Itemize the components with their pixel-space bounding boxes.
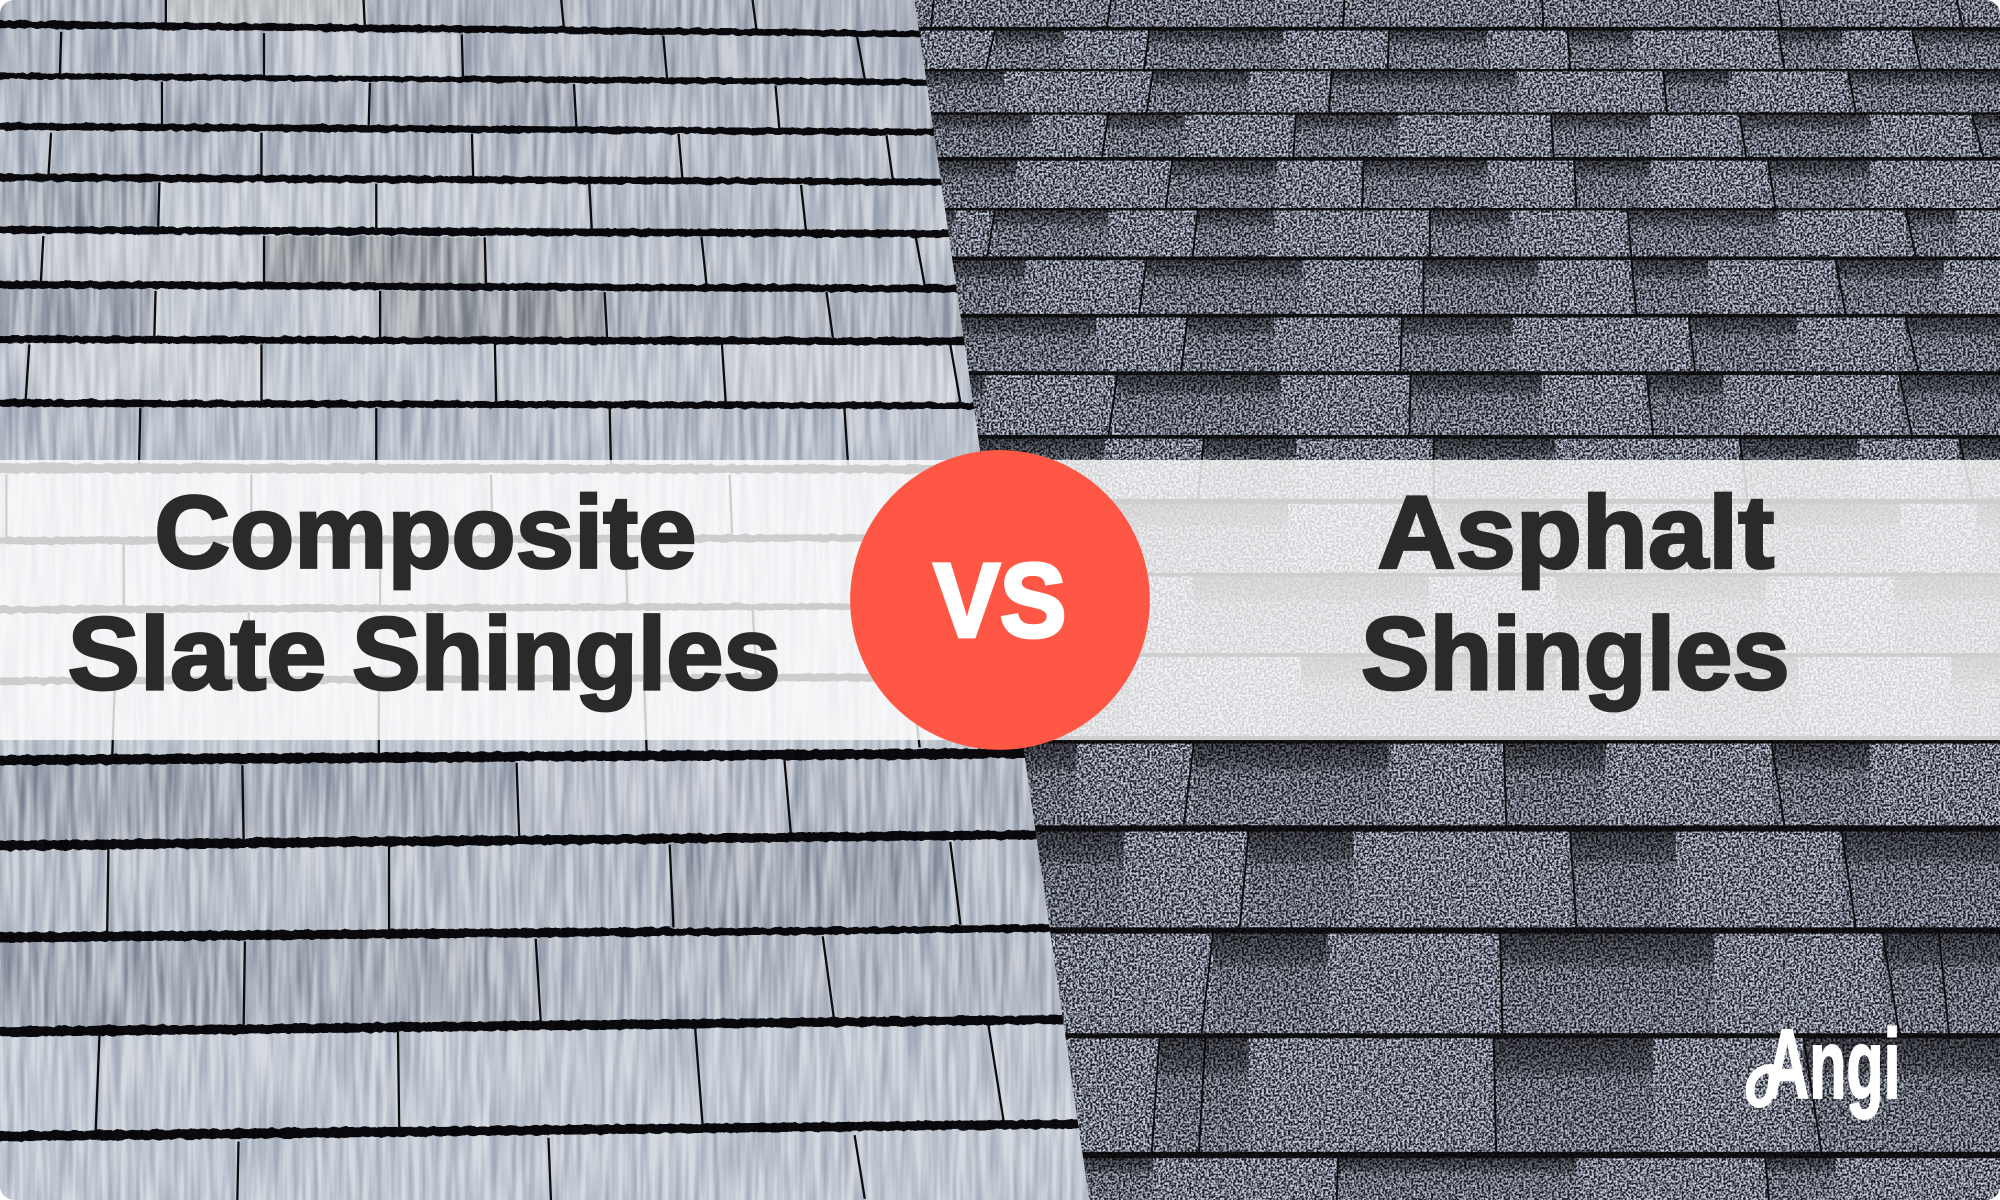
- slate tile tone variations: [0, 0, 950, 1027]
- asphalt shingle rows behind band: [1063, 504, 2000, 736]
- heading: composite slate shingles: Shingles: [352, 595, 781, 711]
- slate streak texture: [0, 0, 1148, 1200]
- asphalt shingle rows below band: [995, 744, 2000, 1200]
- heading: composite slate shingles: Composite: [154, 474, 696, 590]
- panel: composite slate shingles photo: [0, 0, 1148, 1200]
- logo: Angi: Angi: [1765, 1009, 1901, 1119]
- vs badge: VS: [934, 542, 1066, 659]
- vs badge: [850, 450, 1150, 750]
- slate tile joints: [6, 0, 1004, 1200]
- title band: [0, 460, 2000, 740]
- heading: asphalt shingles: Asphalt: [1378, 474, 1774, 590]
- heading: composite slate shingles: [68, 474, 781, 711]
- panel: asphalt shingles photo: [893, 0, 2000, 1200]
- asphalt granule texture: [893, 0, 2000, 1200]
- heading: asphalt shingles: Shingles: [1361, 595, 1790, 711]
- asphalt shingle rows above band: [893, 0, 2000, 499]
- heading: composite slate shingles: Slate: [68, 595, 327, 711]
- heading: asphalt shingles: [1361, 474, 1790, 711]
- logo: Angi: [1746, 1026, 1897, 1120]
- slate tile rows: [0, 0, 1148, 1200]
